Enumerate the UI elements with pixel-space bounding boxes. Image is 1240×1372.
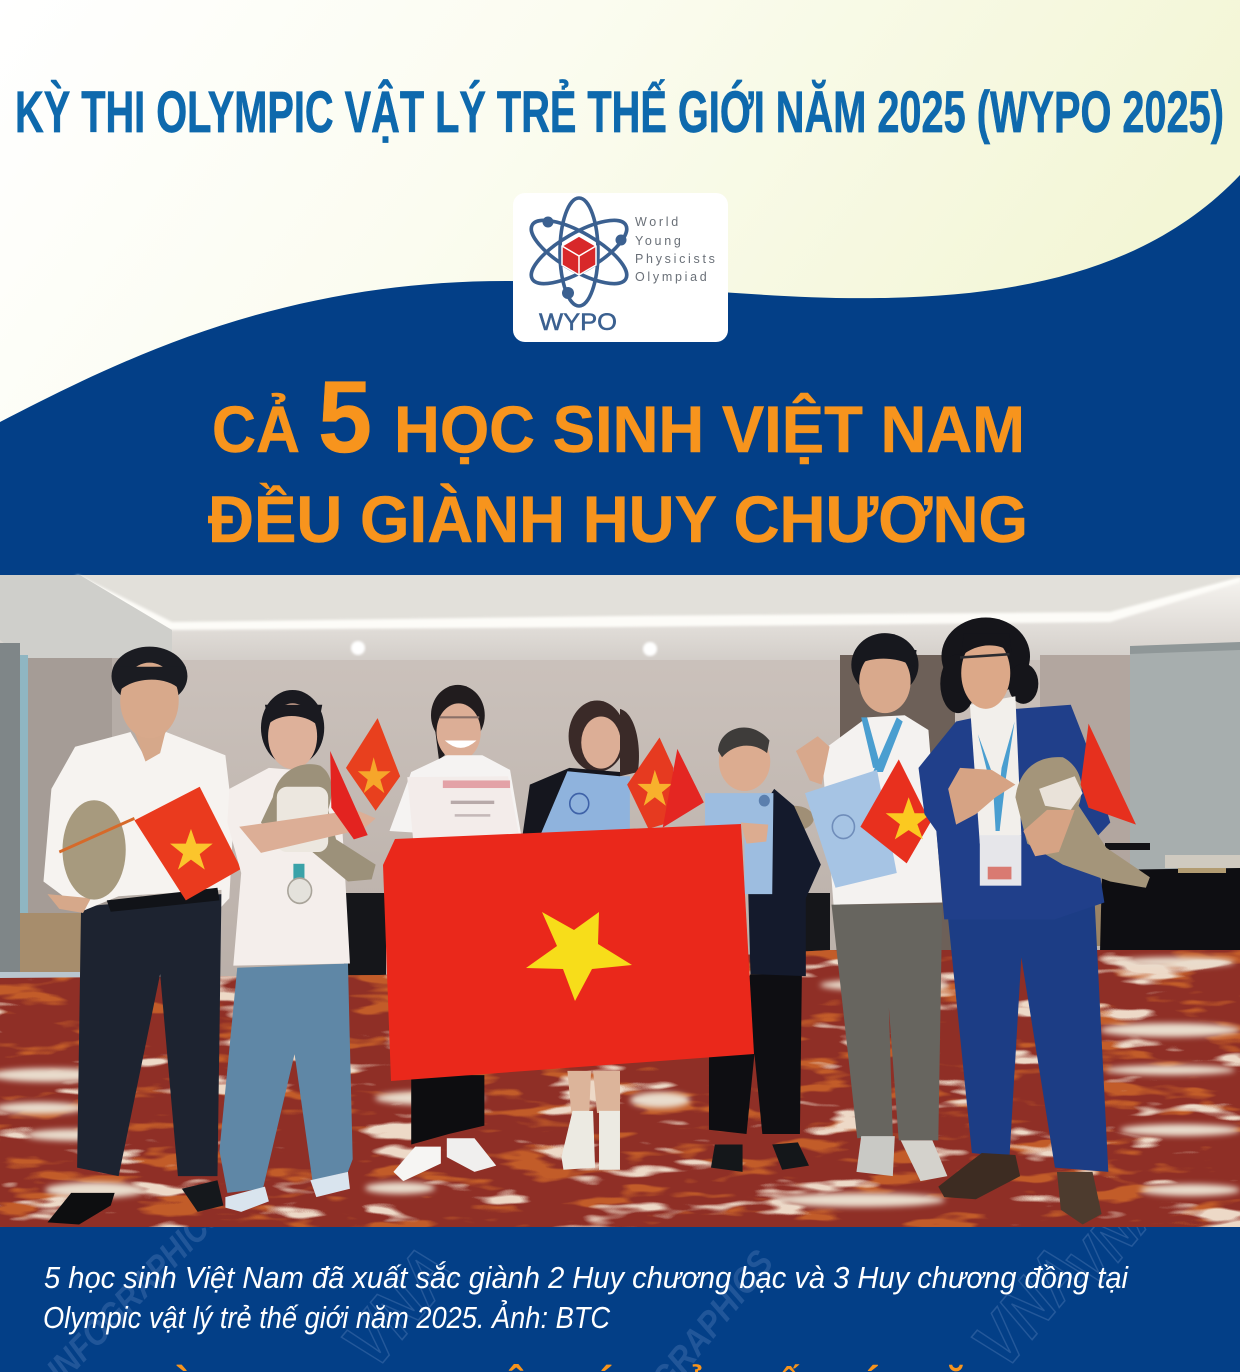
logo wordmark: World bbox=[635, 215, 681, 229]
logo: WYPO bbox=[513, 193, 728, 342]
headline bbox=[208, 360, 1028, 556]
caption: Olympic vật lý trẻ thế giới năm 2025. Ảnh: BTC bbox=[43, 1299, 611, 1335]
watermark bbox=[48, 1227, 1146, 1372]
person 5: boy in dark suit bbox=[705, 727, 821, 1172]
person 4: girl in dark jacket bbox=[522, 700, 626, 1170]
cream wave header bbox=[0, 0, 1240, 422]
people, left half bbox=[43, 647, 626, 1224]
logo wordmark: Olympiad bbox=[635, 270, 709, 284]
logo wordmark bbox=[635, 215, 718, 284]
photo: Vietnamese team with flag bbox=[0, 575, 1240, 1230]
caption: 5 học sinh Việt Nam đã xuất sắc giành 2 Huy chương bạc và 3 Huy chương đồng tại bbox=[44, 1260, 1129, 1295]
headline: 5 bbox=[318, 360, 372, 474]
person 4 hair and hand flags bbox=[620, 709, 704, 831]
watermark: VNA bbox=[1054, 1171, 1176, 1298]
logo wordmark: Young bbox=[635, 234, 684, 248]
room bbox=[0, 575, 1240, 1227]
person 3: girl with certificate bbox=[389, 685, 522, 1181]
person 1: man in white shirt bbox=[43, 647, 241, 1224]
big Vietnamese flag bbox=[383, 824, 754, 1081]
person 7: man in blue suit bbox=[919, 618, 1150, 1224]
person 2: girl in white shirt and blue trousers bbox=[219, 690, 400, 1212]
people, right half bbox=[620, 618, 1150, 1224]
icon: atom bbox=[523, 198, 635, 306]
logo wordmark: Physicists bbox=[635, 252, 718, 266]
headline: CẢ bbox=[212, 392, 300, 466]
logo acronym: WYPO bbox=[539, 309, 617, 336]
carpet bbox=[0, 945, 1240, 1230]
headline: ĐỀU GIÀNH HUY CHƯƠNG bbox=[208, 482, 1028, 556]
person 6: tall boy in white shirt bbox=[796, 633, 947, 1181]
caption bbox=[43, 1260, 1129, 1335]
headline: HỌC SINH VIỆT NAM bbox=[394, 392, 1025, 466]
